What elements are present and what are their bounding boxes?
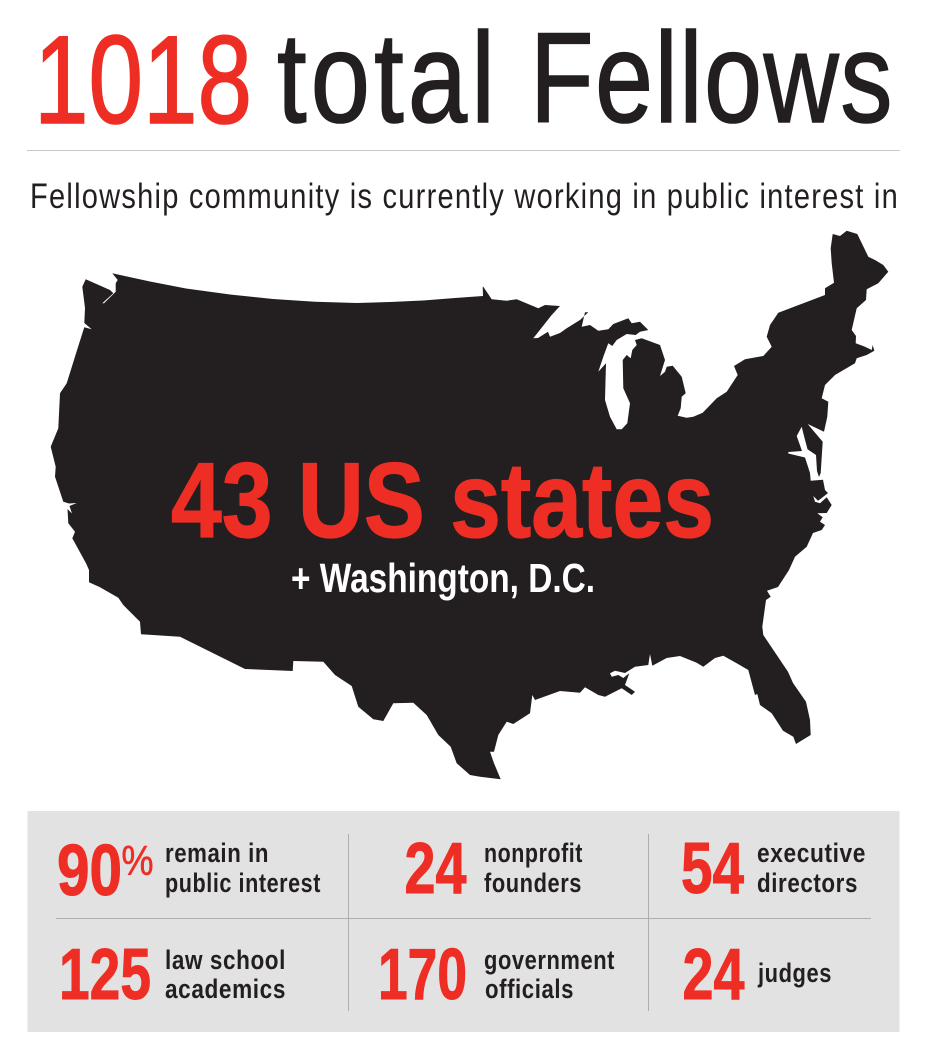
stat: 90% remain in public interest: remain in <box>165 838 269 868</box>
stat: 24 judges: 24 <box>682 935 744 1015</box>
stat: 54 executive directors: directors <box>757 868 858 898</box>
stat: 90% remain in public interest: % <box>122 837 154 884</box>
stat: 90% remain in public interest: 90 <box>57 831 122 911</box>
map of the United States <box>51 231 888 779</box>
stat: 24 nonprofit founders <box>404 829 583 909</box>
stat: 54 executive directors <box>681 829 866 909</box>
stat: 24 nonprofit founders: nonprofit <box>484 838 583 868</box>
stat: 170 government officials: 170 <box>378 935 467 1015</box>
title <box>34 7 894 150</box>
map panel <box>51 231 888 779</box>
stat: 90% remain in public interest: public interest <box>165 868 321 898</box>
stat: 24 judges <box>682 935 832 1015</box>
stats panel <box>28 811 900 1032</box>
stat: 125 law school academics <box>59 935 286 1015</box>
title word: total: total <box>277 7 499 150</box>
stat: 125 law school academics: academics <box>165 974 286 1004</box>
stat: 24 nonprofit founders: 24 <box>404 829 466 909</box>
stat: 170 government officials: officials <box>485 974 574 1004</box>
map headline: 43 US states <box>171 440 714 560</box>
stat: 54 executive directors: 54 <box>681 829 744 909</box>
stat: 170 government officials: government <box>484 945 615 975</box>
stat: 170 government officials <box>378 935 615 1015</box>
stat: 54 executive directors: executive <box>757 838 866 868</box>
title number: 1018 <box>34 11 252 150</box>
stat: 125 law school academics: law school <box>165 945 286 975</box>
map subheadline: + Washington, D.C. <box>291 555 595 601</box>
stat: 24 nonprofit founders: founders <box>484 868 582 898</box>
stat: 125 law school academics: 125 <box>59 935 151 1015</box>
stat: 90% remain in public interest <box>57 831 321 911</box>
stat: 24 judges: judges <box>757 958 832 988</box>
